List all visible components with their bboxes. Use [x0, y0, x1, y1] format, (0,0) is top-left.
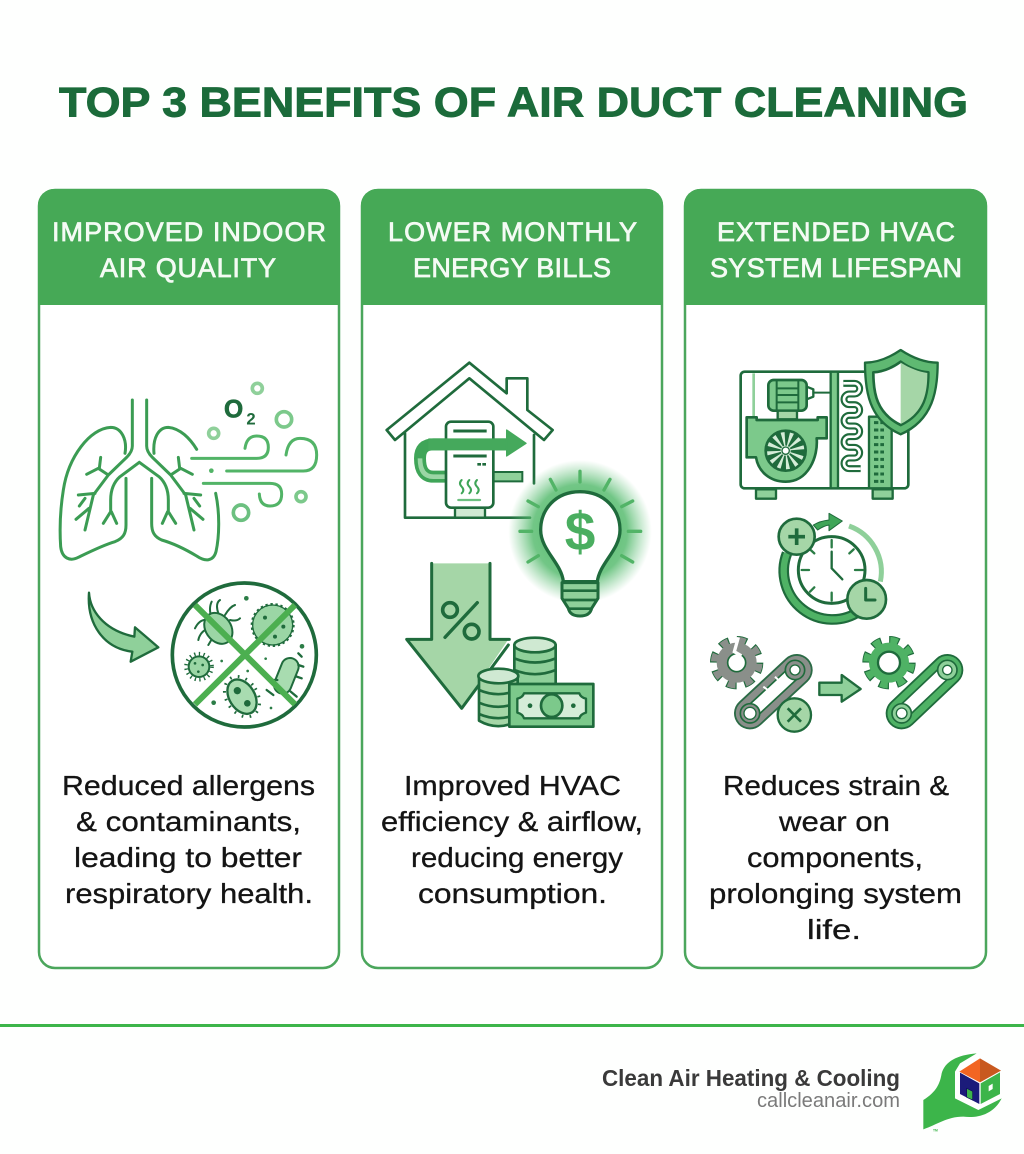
text: benefit description: [62, 770, 315, 909]
icon: down arrow with percent sign: [407, 563, 509, 708]
panel: extended HVAC system lifespan: [684, 189, 987, 968]
text: benefit description: leading to better: [74, 842, 302, 873]
text: benefit description: reducing energy: [411, 842, 623, 873]
icon: lungs with oxygen airflow: O: [224, 397, 243, 424]
arrow: worn parts to restored parts: [819, 675, 861, 702]
text: benefit description: Reduces strain &: [723, 770, 949, 801]
text: benefit description: [709, 770, 962, 945]
text: benefit description: life.: [807, 914, 861, 945]
panel: lower monthly energy bills: [361, 189, 663, 968]
panel header: extended HVAC system lifespan: SYSTEM LIFESPAN: [710, 253, 962, 283]
text: benefit description: Improved HVAC: [404, 770, 621, 801]
icon: HVAC unit with protective shield: [741, 350, 938, 499]
icon: coins and banknote: [478, 638, 593, 727]
panel: improved indoor air quality: [38, 189, 340, 968]
icon: worn gear and broken belt: [714, 637, 811, 732]
arrow: lungs to contaminants: [89, 593, 158, 662]
panel header: lower monthly energy bills: ENERGY BILLS: [413, 253, 611, 283]
title: TOP 3 BENEFITS OF AIR DUCT CLEANING: [59, 78, 968, 126]
icon: house with HVAC heater and airflow arrow: [387, 363, 553, 518]
text: benefit description: components,: [747, 842, 923, 873]
panel header: improved indoor air quality: AIR QUALITY: [100, 253, 276, 283]
icon: lungs with oxygen airflow: [60, 383, 317, 560]
panel header: extended HVAC system lifespan: EXTENDED HVAC: [717, 217, 955, 247]
logo: wrench with house: [923, 1053, 1002, 1133]
text: benefit description: efficiency & airflow,: [381, 806, 643, 837]
text: benefit description: & contaminants,: [76, 806, 301, 837]
logo: wrench with house: TM: [933, 1129, 938, 1133]
footer: company name and website: callcleanair.com: [757, 1090, 900, 1112]
panel header: extended HVAC system lifespan: [684, 189, 987, 305]
text: benefit description: Reduced allergens: [62, 770, 315, 801]
panel header: improved indoor air quality: [38, 189, 340, 305]
icon: lungs with oxygen airflow: 2: [246, 409, 256, 428]
text: benefit description: wear on: [778, 806, 890, 837]
icon: crossed-out allergens and germs: [172, 583, 316, 727]
icon: light bulb with dollar sign: [508, 460, 652, 616]
panel header: lower monthly energy bills: [361, 189, 663, 305]
footer: company name and website: Clean Air Heating & Cooling: [602, 1065, 900, 1091]
panel header: improved indoor air quality: IMPROVED INDOOR: [52, 217, 326, 247]
text: benefit description: prolonging system: [709, 878, 962, 909]
text: benefit description: [381, 770, 643, 909]
text: benefit description: respiratory health.: [65, 878, 313, 909]
footer: company name and website: [602, 1065, 900, 1112]
icon: clock with extended life cycle: [779, 513, 886, 619]
icon: healthy gear and belt: [866, 640, 957, 723]
icon: light bulb with dollar sign: $: [565, 500, 595, 562]
text: benefit description: consumption.: [418, 878, 607, 909]
panel header: lower monthly energy bills: LOWER MONTHLY: [388, 217, 637, 247]
